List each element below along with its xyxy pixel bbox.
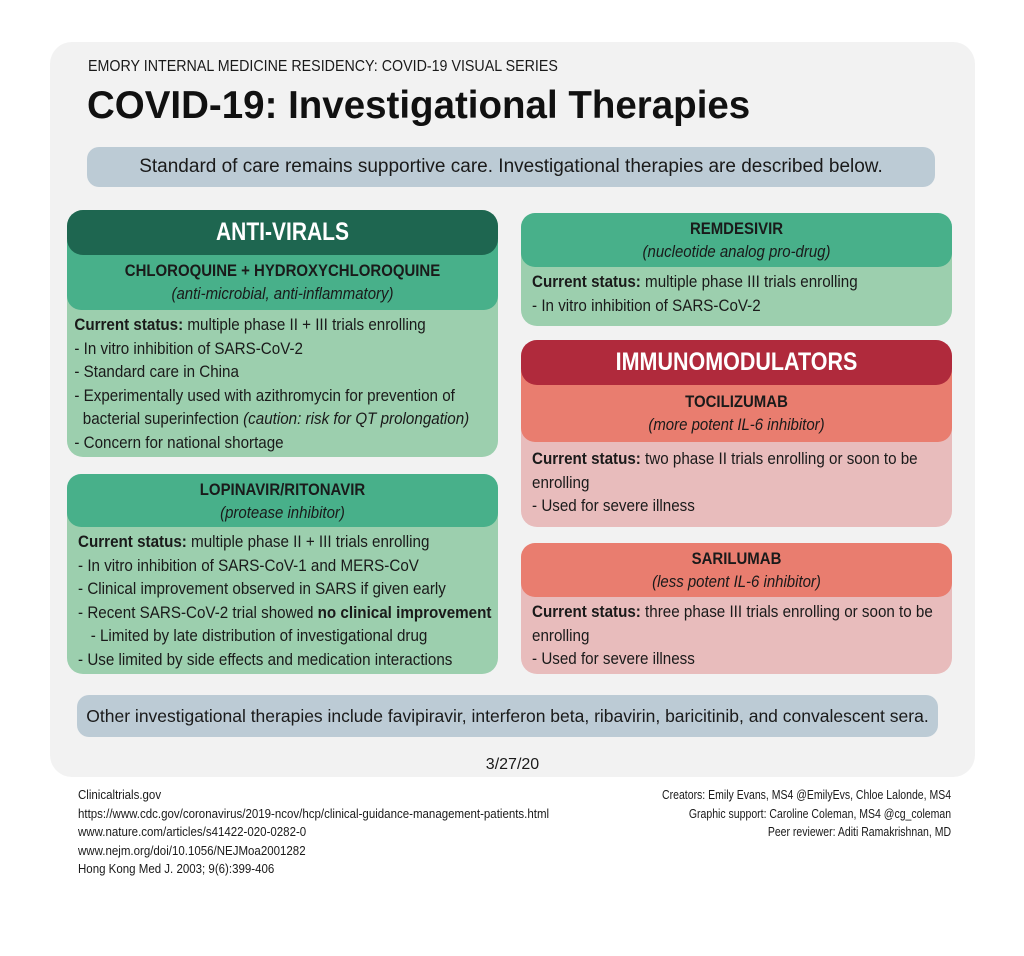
date: 3/27/20: [486, 756, 539, 773]
subheading remdesivir: [521, 213, 952, 267]
references: www.nature.com/articles/s41422-020-0282-0: [78, 825, 306, 839]
text: lopinavir status: - Use limited by side effects and medication interactions: [78, 650, 452, 668]
text: chloroquine status: - Standard care in China: [74, 363, 239, 381]
text: lopinavir status: - In vitro inhibition of SARS-CoV-1 and MERS-CoV: [78, 556, 419, 574]
panel: chloroquine: [67, 210, 498, 457]
references: Clinicaltrials.gov: [78, 788, 161, 802]
subheading sarilumab: (less potent IL-6 inhibitor): [652, 572, 821, 591]
credits: Peer reviewer: Aditi Ramakrishnan, MD: [768, 825, 951, 839]
panel: sarilumab: [521, 543, 952, 674]
heading: immunomodulators: [521, 340, 952, 385]
references: www.nejm.org/doi/10.1056/NEJMoa2001282: [78, 844, 306, 858]
text: chloroquine status: Current status: multiple phase II + III trials enrolling: [74, 316, 426, 334]
supertitle: EMORY INTERNAL MEDICINE RESIDENCY: COVID-19 VISUAL SERIES: [88, 58, 558, 75]
subheading lopinavir: [67, 474, 498, 527]
text: lopinavir status: Current status: multiple phase II + III trials enrolling: [78, 533, 429, 551]
heading: anti-virals: ANTI-VIRALS: [216, 218, 349, 246]
subheading remdesivir: REMDESIVIR: [690, 219, 783, 238]
references: Hong Kong Med J. 2003; 9(6):399-406: [78, 862, 274, 876]
subheading remdesivir: (nucleotide analog pro-drug): [643, 242, 830, 261]
text: chloroquine status: [74, 316, 469, 452]
banner: standard of care: Standard of care remains supportive care. Investigational therapies are described below.: [139, 156, 883, 177]
panel: tocilizumab: [521, 340, 952, 527]
banner: other therapies: Other investigational therapies include favipiravir, interferon beta, ribavirin, baricitinib, and convalescent sera.: [86, 706, 929, 726]
subheading tocilizumab: (more potent IL-6 inhibitor): [648, 415, 825, 434]
references: [78, 788, 549, 876]
text: remdesivir status: [532, 273, 858, 314]
heading: anti-virals: [67, 210, 498, 255]
references: https://www.cdc.gov/coronavirus/2019-ncov/hcp/clinical-guidance-management-patients.html: [78, 806, 549, 820]
text: tocilizumab status: Current status: two phase II trials enrolling or soon to be: [532, 450, 918, 468]
banner: other therapies: [77, 695, 938, 737]
text: sarilumab status: Current status: three phase III trials enrolling or soon to be: [532, 603, 933, 621]
subheading tocilizumab: TOCILIZUMAB: [685, 392, 788, 411]
subheading chloroquine: CHLOROQUINE + HYDROXYCHLOROQUINE: [125, 261, 440, 280]
text: chloroquine status: bacterial superinfection (caution: risk for QT prolongation): [83, 410, 469, 428]
text: sarilumab status: [532, 603, 933, 668]
subheading chloroquine: (anti-microbial, anti-inflammatory): [172, 284, 393, 303]
text: remdesivir status: Current status: multiple phase III trials enrolling: [532, 273, 858, 291]
text: chloroquine status: - In vitro inhibition of SARS-CoV-2: [74, 340, 303, 358]
text: sarilumab status: enrolling: [532, 626, 589, 644]
panel: lopinavir: [67, 474, 498, 674]
subheading sarilumab: [521, 543, 952, 597]
banner: standard of care: [87, 147, 935, 187]
outer panel: [50, 42, 975, 777]
text: remdesivir status: - In vitro inhibition of SARS-CoV-2: [532, 296, 761, 314]
text: tocilizumab status: - Used for severe illness: [532, 497, 695, 515]
title: COVID-19: Investigational Therapies: [87, 84, 750, 127]
subheading tocilizumab: [521, 370, 952, 442]
text: lopinavir status: - Clinical improvement observed in SARS if given early: [78, 580, 446, 598]
credits: Graphic support: Caroline Coleman, MS4 @cg_coleman: [689, 806, 951, 820]
subheading lopinavir: LOPINAVIR/RITONAVIR: [200, 480, 365, 499]
text: tocilizumab status: [532, 450, 918, 515]
text: chloroquine status: - Concern for national shortage: [74, 434, 284, 452]
text: lopinavir status: - Limited by late distribution of investigational drug: [91, 627, 427, 645]
subheading chloroquine: [67, 240, 498, 310]
heading: immunomodulators: IMMUNOMODULATORS: [616, 348, 857, 376]
text: lopinavir status: [78, 533, 492, 668]
subheading sarilumab: SARILUMAB: [692, 549, 781, 568]
credits: [662, 788, 951, 839]
text: tocilizumab status: enrolling: [532, 474, 589, 492]
subheading lopinavir: (protease inhibitor): [220, 503, 345, 522]
credits: Creators: Emily Evans, MS4 @EmilyEvs, Chloe Lalonde, MS4: [662, 788, 951, 802]
text: chloroquine status: - Experimentally used with azithromycin for prevention of: [74, 386, 455, 404]
text: sarilumab status: - Used for severe illness: [532, 650, 695, 668]
text: lopinavir status: - Recent SARS-CoV-2 trial showed no clinical improvement: [78, 604, 491, 622]
panel: remdesivir: [521, 213, 952, 326]
